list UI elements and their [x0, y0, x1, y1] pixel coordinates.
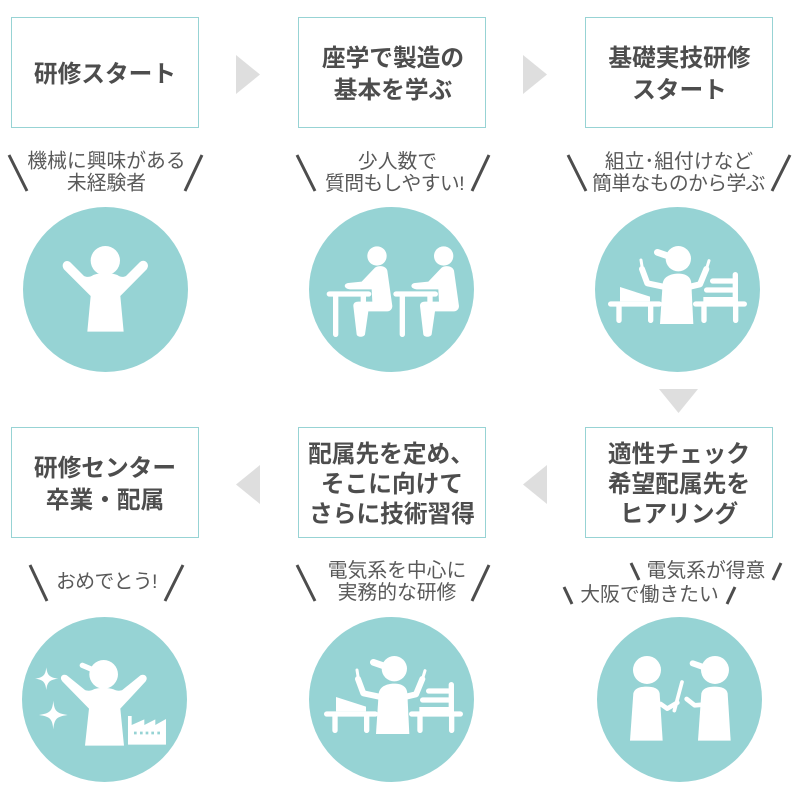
text: step 5 caption: 電気系を中心に — [328, 560, 466, 582]
arrow: step 3 to 4 — [659, 389, 698, 413]
panel: step 1 box: 研修スタート — [34, 61, 176, 88]
panel: step 1 box — [12, 18, 198, 128]
text: step 5 caption — [297, 560, 489, 604]
panel: step 4 box: ヒアリング — [620, 500, 739, 528]
text: step 2 caption — [297, 151, 489, 195]
panel: step 4 box: 希望配属先を — [608, 471, 750, 498]
panel: step 2 box: 座学で製造の — [322, 45, 464, 72]
text: step 3 caption — [568, 151, 790, 195]
text: step 6 caption: おめでとう! — [56, 571, 157, 593]
panel: step 3 box: スタート — [632, 77, 727, 104]
text: step 4 caption: 大阪で働きたい — [580, 584, 719, 606]
panel: step 5 box: そこに向けて — [321, 471, 463, 498]
icon: assembly training, electrical — [309, 617, 474, 782]
panel: step 2 box — [298, 18, 486, 128]
panel: step 3 box: 基礎実技研修 — [608, 45, 751, 72]
text: step 2 caption: 質問もしやすい! — [325, 173, 464, 195]
panel: step 4 box — [586, 428, 772, 538]
text: step 1 caption — [9, 150, 202, 194]
icon: two people at desks — [309, 207, 474, 372]
icon: person raising arms — [23, 207, 188, 372]
panel: step 5 box — [298, 428, 486, 538]
arrow: step 4 to 5 — [523, 465, 547, 504]
panel: step 5 box: さらに技術習得 — [309, 501, 475, 528]
icon: graduate with factory — [22, 617, 187, 782]
panel: step 3 box — [586, 18, 772, 128]
text: step 4 caption: 電気系が得意 — [647, 560, 765, 582]
panel: step 6 box: 研修センター — [34, 455, 176, 482]
text: step 4 caption — [564, 560, 781, 606]
arrow: step 1 to 2 — [236, 55, 260, 94]
text: step 6 caption — [30, 565, 183, 601]
text: step 2 caption: 少人数で — [358, 151, 437, 173]
panel: step 5 box: 配属先を定め、 — [308, 441, 474, 468]
text: step 3 caption: 組立･組付けなど — [605, 151, 753, 173]
panel: step 6 box: 卒業・配属 — [46, 487, 164, 514]
arrow: step 2 to 3 — [523, 55, 547, 94]
text: step 3 caption: 簡単なものから学ぶ — [592, 173, 765, 195]
text: step 1 caption: 未経験者 — [67, 172, 146, 194]
icon: assembly training — [595, 207, 760, 372]
text: step 1 caption: 機械に興味がある — [27, 150, 186, 172]
text: step 5 caption: 実務的な研修 — [338, 582, 457, 604]
panel: step 2 box: 基本を学ぶ — [334, 77, 453, 104]
panel: step 4 box: 適性チェック — [608, 441, 750, 468]
icon: interview between two people — [597, 617, 762, 782]
panel: step 6 box — [12, 428, 198, 538]
arrow: step 5 to 6 — [236, 465, 260, 504]
